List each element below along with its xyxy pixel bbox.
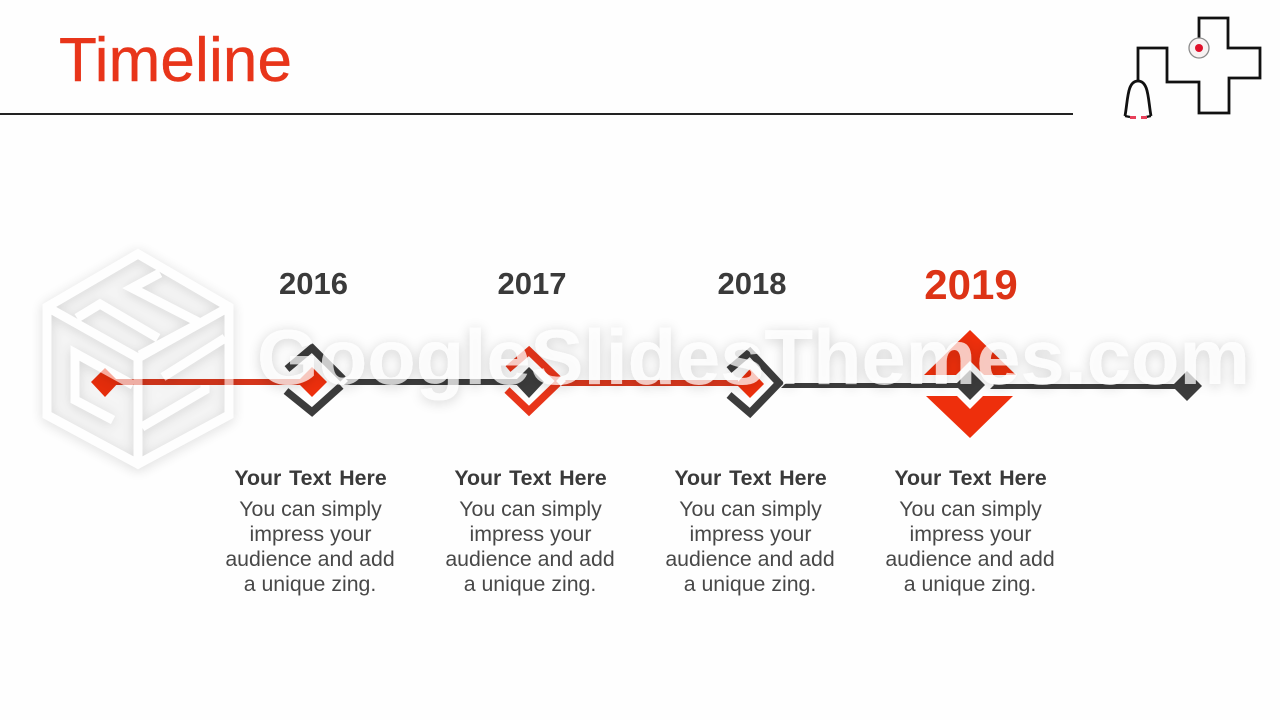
end marker [1172, 371, 1202, 401]
text block 2018: You can simply [679, 497, 822, 521]
text block 2017: Your Text Here [454, 466, 607, 490]
text block 2016: impress your [250, 522, 371, 546]
text block 2019 [885, 466, 1055, 596]
watermark logo: isometric cube [43, 250, 233, 468]
text block 2017: You can simply [459, 497, 602, 521]
text block 2019: a unique zing. [904, 572, 1036, 596]
text block 2017 [445, 466, 615, 596]
node 2019 [924, 330, 1016, 438]
text block 2017: a unique zing. [464, 572, 596, 596]
text block 2019: impress your [910, 522, 1031, 546]
node 2017 [494, 345, 566, 417]
text block 2016: You can simply [239, 497, 382, 521]
year labels: 2019 [924, 261, 1018, 308]
icon: medical cross with stethoscope [1125, 18, 1260, 119]
timeline connector segments [105, 379, 1187, 389]
year labels: 2018 [718, 266, 786, 301]
text block 2019: audience and add [885, 547, 1055, 571]
node 2016 [276, 346, 348, 416]
text block 2018: impress your [690, 522, 811, 546]
year labels [279, 261, 1018, 308]
text block 2018 [665, 466, 835, 596]
text block 2019: You can simply [899, 497, 1042, 521]
text block 2016: Your Text Here [234, 466, 387, 490]
node 2018 [714, 347, 786, 419]
start marker [91, 368, 119, 397]
watermark text: GoogleSlidesThemes.com [257, 313, 1250, 401]
text block 2016: a unique zing. [244, 572, 376, 596]
text block 2018: Your Text Here [674, 466, 827, 490]
year labels: 2017 [498, 266, 566, 301]
text block 2016 [225, 466, 395, 596]
text block 2017: audience and add [445, 547, 615, 571]
text block 2019: Your Text Here [894, 466, 1047, 490]
text block 2016: audience and add [225, 547, 395, 571]
text block 2017: impress your [470, 522, 591, 546]
year labels: 2016 [279, 266, 348, 301]
text block 2018: audience and add [665, 547, 835, 571]
text block 2018: a unique zing. [684, 572, 816, 596]
title: Timeline [59, 26, 292, 95]
timeline graphic [91, 330, 1202, 438]
